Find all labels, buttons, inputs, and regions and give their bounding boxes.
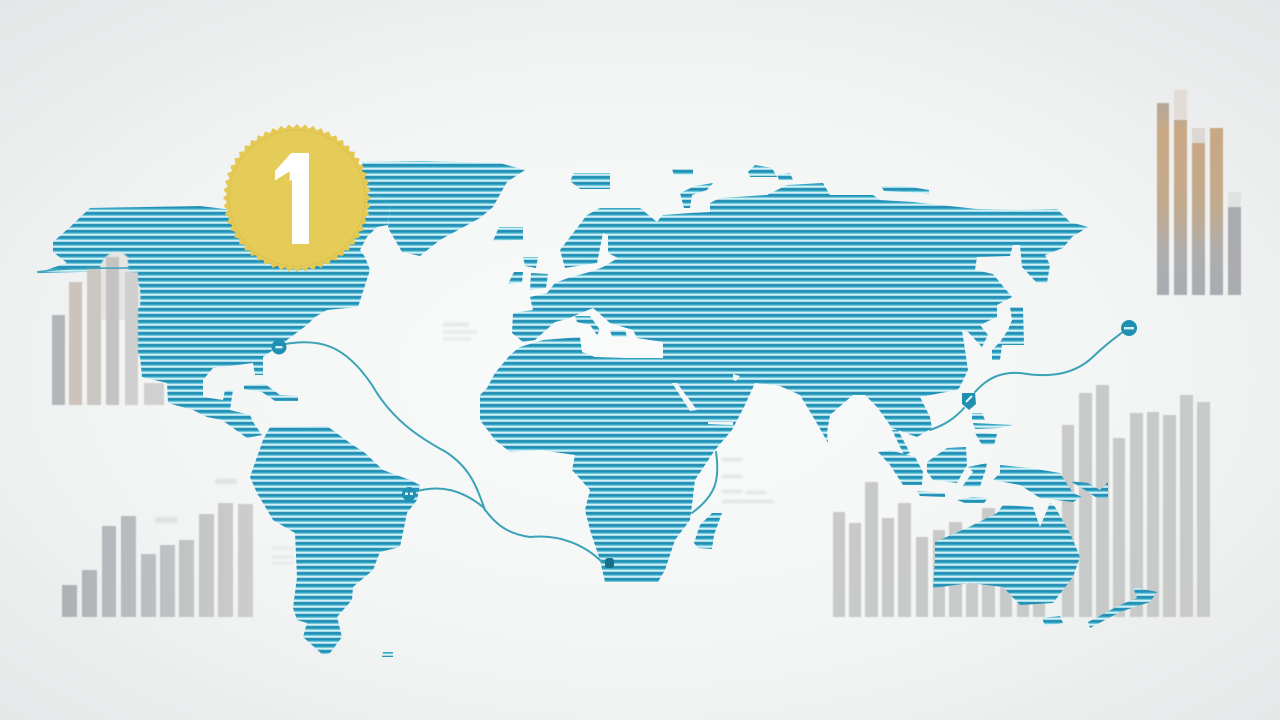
route lines [285,331,1124,562]
island: South Atlantic [382,652,393,657]
islands: Japan [992,307,1024,360]
bar chart: upper left, over the map [37,252,164,405]
marker: Brazil [402,487,416,501]
marker: Philippines pin [962,393,976,410]
continent: Australia [933,503,1080,605]
badge serrated edge [223,124,371,272]
bar chart: lower right [833,385,1210,617]
route: Southeast Asia to Pacific [930,408,964,430]
badge disc [227,128,367,268]
continent: North America [37,185,390,438]
faint blurred captions [155,323,774,564]
island: Iceland [493,227,523,241]
world map [37,161,1157,657]
marker: South Africa [605,558,614,568]
bar chart: upper right [1157,90,1241,295]
bar chart: lower left [62,503,253,617]
location markers [272,320,1137,568]
peninsulas: Italy and Greece [575,316,627,337]
island: New Guinea [993,465,1082,502]
teal line crossing bars [37,268,130,272]
route: East Africa [692,452,717,513]
continent: Greenland [362,161,525,256]
gold badge with number 1 [223,124,371,272]
marker: Pacific [1121,320,1137,336]
badge inner ring [229,130,365,266]
islands: Arctic [672,165,929,208]
islands: Pacific [1070,481,1108,498]
island: Tasmania [1042,616,1063,626]
sea cracks: Red Sea and Gulf of Aden [672,374,740,425]
continent: Africa [480,337,745,582]
islands: New Zealand [1088,587,1157,628]
pale halo behind bars [100,252,140,320]
marker: Atlantic coast [272,340,286,354]
island: Madagascar [694,513,722,549]
islands: Southeast Asia [878,413,1013,503]
island: Svalbard [570,173,610,189]
route: North America to South Atlantic [285,342,485,510]
route: South America to South Africa [414,488,602,562]
islands: Caribbean [244,384,298,401]
number one: 1 [253,120,340,295]
infographic canvas [36,90,1242,657]
islands: British Isles [508,257,548,290]
continent: South America [250,426,420,655]
continent: Eurasia [512,183,1088,443]
